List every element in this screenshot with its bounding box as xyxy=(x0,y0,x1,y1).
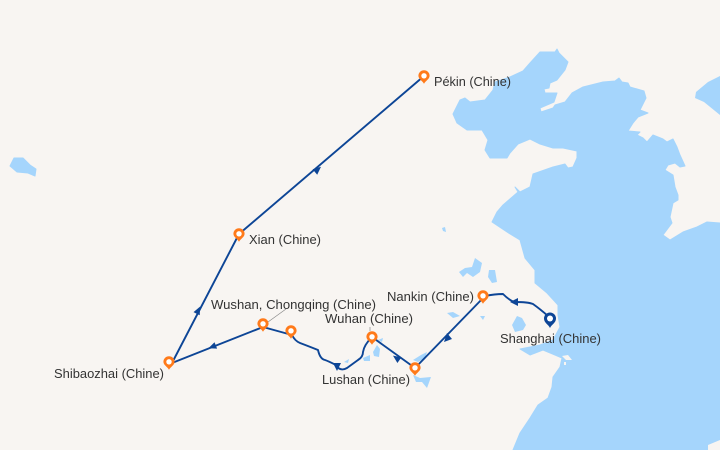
label: Nankin: Nankin (Chine) xyxy=(387,289,474,304)
pin: river stop xyxy=(285,325,297,339)
label: Shibaozhai: Shibaozhai (Chine) xyxy=(54,366,164,381)
leader lines xyxy=(268,309,370,331)
coastal land: Chongming and offshore islets xyxy=(562,355,720,450)
pin: Xian xyxy=(233,228,245,242)
sea: Bohai and Yellow Sea xyxy=(453,49,720,450)
label: Pékin: Pékin (Chine) xyxy=(434,74,511,89)
pin: Nankin xyxy=(477,290,489,304)
lake west xyxy=(10,158,36,176)
label: Wushan, Chongqing: Wushan, Chongqing (Chine) xyxy=(211,297,376,312)
island east xyxy=(665,261,684,268)
pin: Pékin xyxy=(418,70,430,84)
label: Shanghai: Shanghai (Chine) xyxy=(500,331,601,346)
lakes and rivers xyxy=(344,227,526,388)
pin: Lushan xyxy=(409,362,421,376)
label: Wuhan: Wuhan (Chine) xyxy=(325,311,413,326)
pin: Shibaozhai xyxy=(163,356,175,370)
sea: upper right xyxy=(695,76,720,115)
route arrows xyxy=(194,167,518,371)
label: Lushan: Lushan (Chine) xyxy=(322,372,410,387)
pin: Wuhan xyxy=(366,331,378,345)
pin: Shanghai port xyxy=(544,312,556,328)
route line xyxy=(172,76,548,369)
label: Xian: Xian (Chine) xyxy=(249,232,321,247)
pin: Wushan, Chongqing xyxy=(257,318,269,332)
